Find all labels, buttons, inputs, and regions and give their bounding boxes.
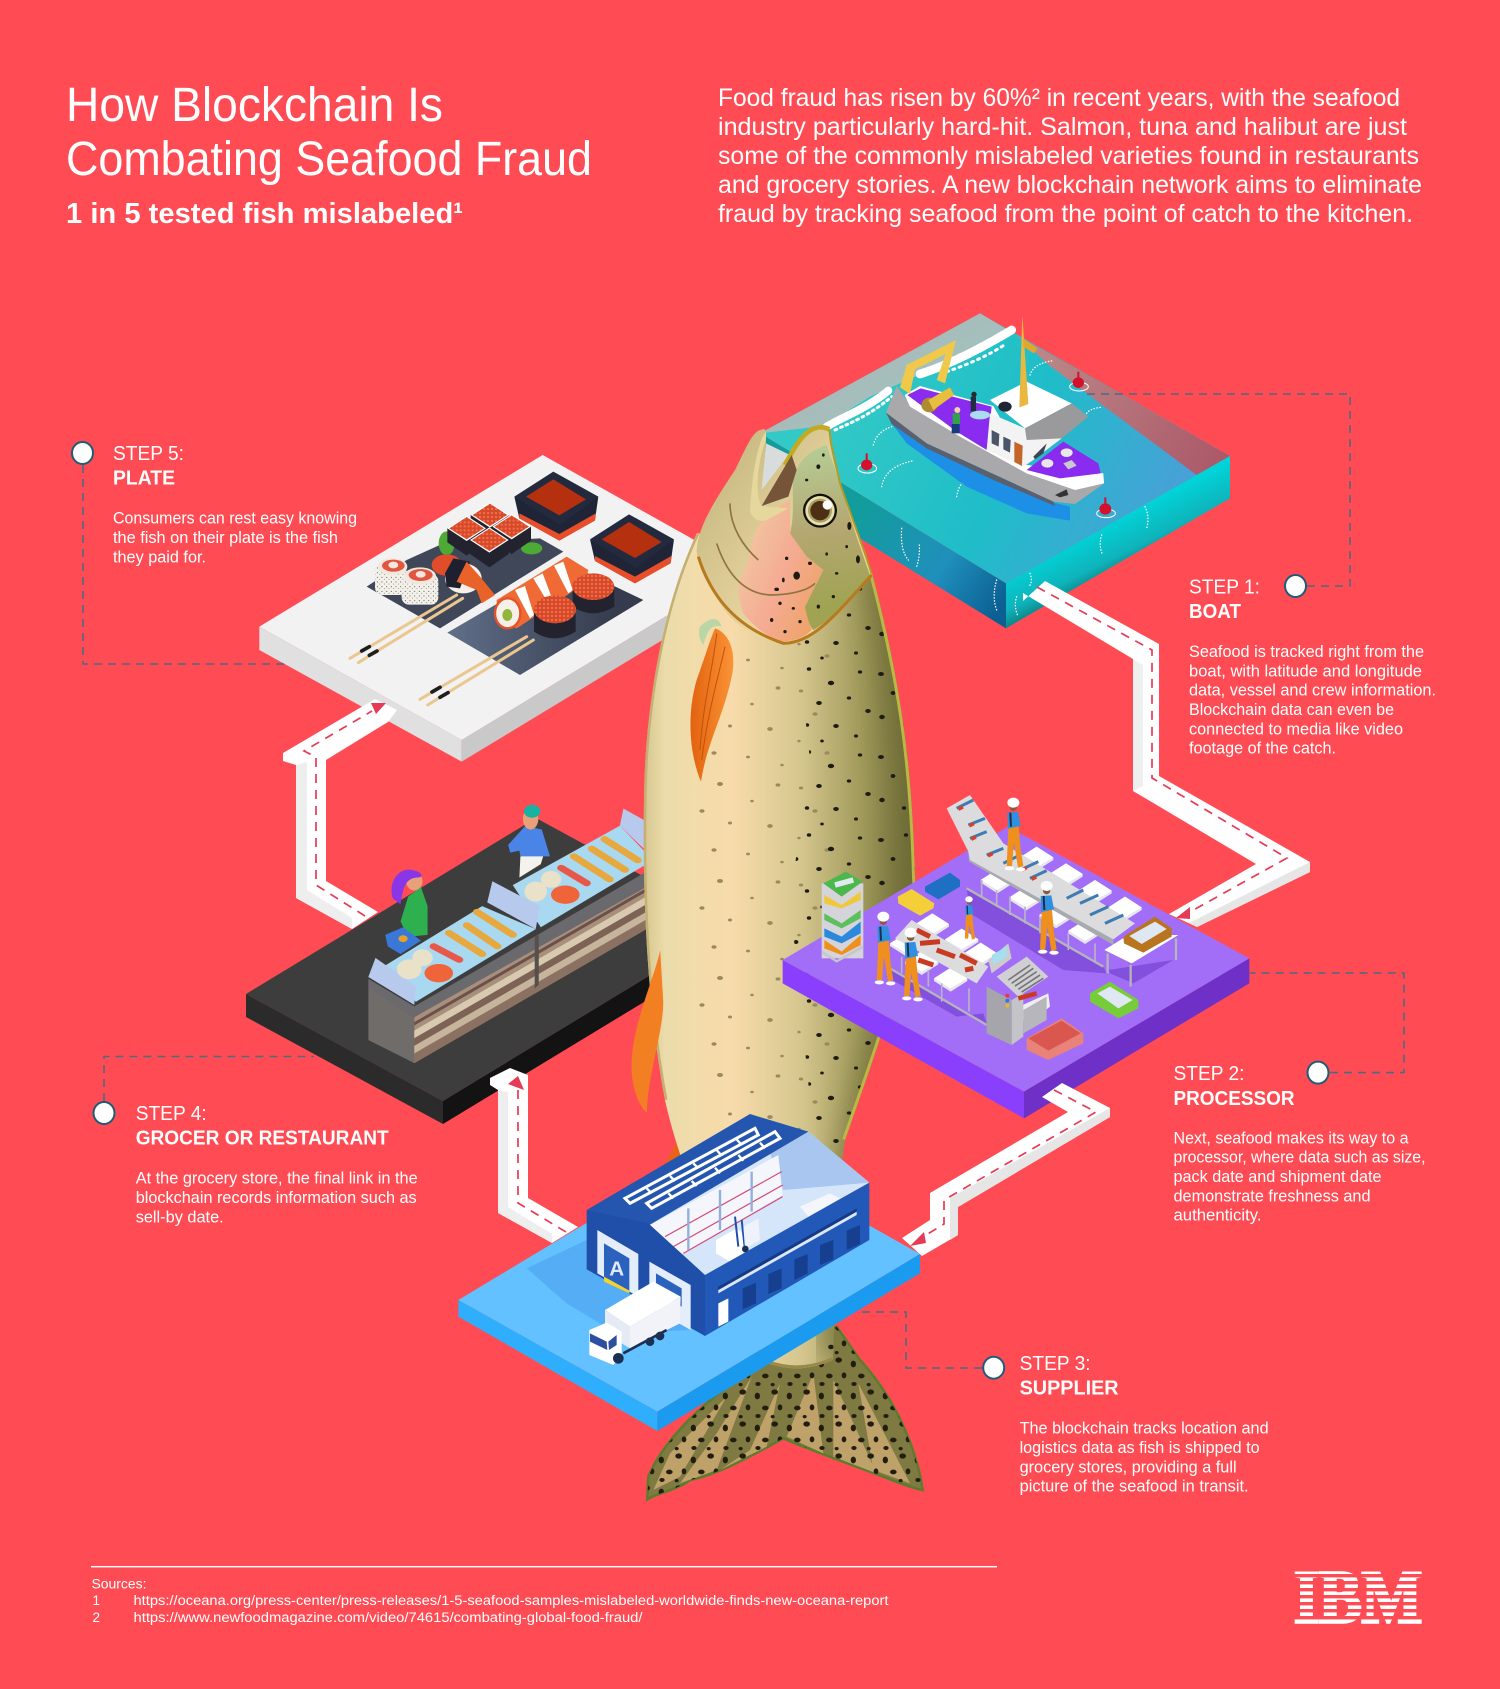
salmon roll [495, 557, 588, 628]
step 3: supplier label [857, 1312, 1269, 1496]
interior [648, 1132, 869, 1275]
tail fin [647, 1327, 923, 1499]
marker [1308, 1062, 1328, 1084]
step heading: PLATE [113, 466, 175, 490]
step text: connected to media like video [1189, 720, 1403, 738]
display case [368, 809, 653, 1063]
step text: Consumers can rest easy knowing [113, 510, 357, 528]
slab [783, 827, 1249, 1092]
step text: sell-by date. [136, 1208, 224, 1226]
step text: Blockchain data can even be [1189, 701, 1394, 719]
glass dividers [368, 958, 416, 1005]
shadows [967, 888, 1107, 973]
mouth gap [761, 443, 790, 495]
marker [94, 1102, 114, 1124]
conveyor belt upper [947, 795, 1135, 945]
intro paragraph [718, 84, 1422, 228]
mouth [762, 455, 797, 506]
packing table and orange crate [1104, 917, 1178, 987]
title: How Blockchain Is [66, 79, 443, 132]
icon: buoys [858, 372, 1115, 518]
platform: step 5 plate [259, 455, 745, 762]
step text: blockchain records information such as [136, 1189, 417, 1207]
person: shopper [385, 870, 428, 954]
roof [587, 1114, 808, 1227]
platform: step 1 boat [760, 313, 1230, 628]
step text: demonstrate freshness and [1174, 1187, 1370, 1205]
step text [113, 510, 357, 566]
nigiri [432, 554, 495, 603]
lip [750, 432, 788, 521]
step text: pack date and shipment date [1174, 1168, 1382, 1186]
body shading and spots [644, 533, 930, 1370]
green leaves [439, 531, 455, 555]
step 1: boat label [1082, 394, 1436, 758]
fishing boat [886, 315, 1104, 521]
gill cover [698, 557, 872, 643]
intro paragraph: some of the commonly mislabeled varieties found in restaurants [718, 142, 1419, 170]
intro paragraph: fraud by tracking seafood from the point of catch to the kitchen. [718, 200, 1413, 228]
person: fishmonger [508, 805, 550, 877]
intro paragraph: industry particularly hard-hit. Salmon, tuna and halibut are just [718, 113, 1407, 141]
upper head green [790, 445, 870, 630]
footer sources: Sources: [92, 1576, 146, 1592]
marker [1285, 575, 1306, 597]
loading door A: A [609, 1258, 624, 1281]
conveyor arrow: step 2 to step 3 [902, 1083, 1110, 1256]
plate slab [259, 455, 745, 740]
leader line [1082, 394, 1350, 586]
step heading: STEP 4: [136, 1102, 207, 1125]
ventral fin [632, 950, 663, 1113]
step text [1020, 1420, 1269, 1496]
sauce dishes [514, 472, 598, 541]
step heading [113, 442, 184, 490]
marker [983, 1357, 1004, 1379]
step heading: STEP 5: [113, 442, 184, 465]
body [644, 533, 915, 1368]
chopsticks [350, 595, 533, 705]
step heading: BOAT [1189, 600, 1241, 623]
step heading [1174, 1062, 1295, 1110]
step text: they paid for. [113, 548, 206, 566]
step heading [136, 1102, 389, 1150]
step text: logistics data as fish is shipped to [1020, 1439, 1260, 1457]
cheek [738, 500, 823, 642]
step heading [1020, 1352, 1119, 1400]
processing machine [987, 943, 1050, 1045]
windows [743, 1225, 860, 1309]
foam [827, 330, 1148, 617]
loading door [649, 1262, 691, 1330]
step 5: plate label [72, 442, 357, 664]
step text: Next, seafood makes its way to a [1174, 1129, 1409, 1147]
counter slab [246, 818, 733, 1101]
step text: data, vessel and crew information. [1189, 682, 1436, 700]
step heading: PROCESSOR [1174, 1087, 1295, 1110]
racks [650, 1155, 840, 1255]
IBM logo: IBM [1294, 1557, 1422, 1639]
intro paragraph: and grocery stories. A new blockchain network aims to eliminate [718, 171, 1422, 199]
workers [1005, 798, 1025, 871]
footer sources: 2 [92, 1610, 100, 1625]
step text: Seafood is tracked right from the [1189, 643, 1424, 661]
leader line [83, 465, 285, 664]
head [690, 426, 872, 782]
crate: blue [925, 873, 960, 899]
step 4: grocer label [94, 1056, 418, 1226]
fish [632, 426, 930, 1499]
step heading: GROCER OR RESTAURANT [136, 1127, 389, 1150]
truck [589, 1282, 681, 1365]
marker [72, 442, 93, 464]
title [66, 79, 592, 186]
conveyor arrow: step 3 to step 4 [490, 1068, 578, 1243]
step text [1189, 643, 1436, 758]
step text: footage of the catch. [1189, 740, 1336, 758]
platform: step 2 processor [783, 795, 1249, 1118]
step text: authenticity. [1174, 1207, 1262, 1225]
seafood [397, 839, 638, 982]
roe gunkan [534, 573, 614, 638]
gable wall [587, 1210, 705, 1336]
fishermen [952, 392, 990, 433]
intro paragraph: Food fraud has risen by 60%² in recent years, with the seafood [718, 84, 1400, 112]
loading door A [597, 1230, 638, 1297]
title: Combating Seafood Fraud [66, 133, 592, 186]
solar panels [625, 1128, 780, 1208]
step heading [1189, 576, 1260, 623]
platform: step 4 grocer [246, 805, 733, 1124]
platform: step 3 supplier [458, 1114, 920, 1431]
slate trays [367, 538, 563, 628]
white rolls [375, 558, 438, 605]
crate: red [1027, 1018, 1083, 1060]
step text: The blockchain tracks location and [1020, 1420, 1269, 1438]
title block [66, 79, 592, 230]
step text: processor, where data such as size, [1174, 1149, 1426, 1167]
step text [136, 1170, 418, 1226]
step text: picture of the seafood in transit. [1020, 1478, 1249, 1496]
conveyor arrow: step 1 to step 2 [1023, 581, 1310, 927]
footer sources [91, 1566, 997, 1625]
step heading: SUPPLIER [1020, 1376, 1119, 1400]
crate: green [1090, 982, 1138, 1018]
gunkan rolls [471, 502, 509, 542]
step text: grocery stores, providing a full [1020, 1458, 1237, 1476]
forklift [716, 1217, 760, 1262]
conveyor belt lower [895, 920, 988, 983]
footer sources: 1 [92, 1593, 100, 1608]
slab [458, 1142, 920, 1412]
small orange fin [665, 1133, 688, 1163]
step text [1174, 1129, 1426, 1225]
footer sources: https://oceana.org/press-center/press-releases/1-5-seafood-samples-mislabeled-worldwide-finds-new-oceana-report [134, 1593, 889, 1608]
head spots [770, 453, 860, 633]
eye [803, 494, 837, 528]
crate: yellow [898, 889, 934, 916]
conveyor arrow: step 4 to step 5 [283, 699, 397, 929]
ocean surface [760, 313, 1230, 583]
side wall [705, 1183, 869, 1336]
step text: boat, with latitude and longitude [1189, 662, 1422, 680]
leader line [857, 1312, 982, 1368]
step heading: STEP 1: [1189, 576, 1260, 598]
warehouse [587, 1114, 869, 1365]
storage rack [822, 872, 863, 963]
subtitle: 1 in 5 tested fish mislabeled¹ [66, 198, 463, 230]
step heading: STEP 2: [1174, 1062, 1244, 1085]
step text: the fish on their plate is the fish [113, 529, 338, 547]
chilled tray right [513, 826, 653, 927]
leader line [104, 1056, 314, 1101]
chilled tray left [385, 906, 536, 1002]
conveyor tables [890, 847, 1142, 1025]
step heading: STEP 3: [1020, 1352, 1091, 1375]
step text: At the grocery store, the final link in the [136, 1170, 418, 1188]
step 2: processor label [1174, 973, 1426, 1225]
leader line [1250, 973, 1404, 1073]
pectoral fin [690, 628, 733, 782]
footer sources: https://www.newfoodmagazine.com/video/74615/combating-global-food-fraud/ [134, 1610, 643, 1625]
